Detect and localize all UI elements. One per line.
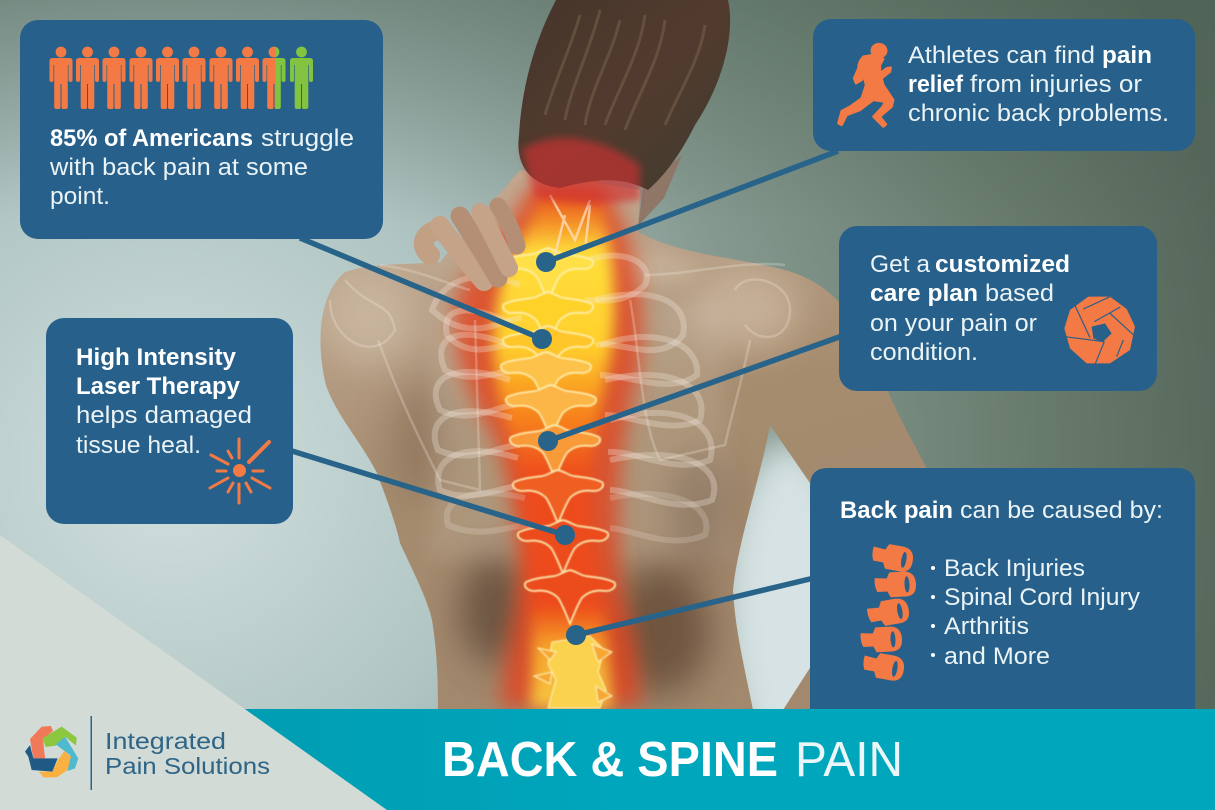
bullet list: Spinal Cord Injury xyxy=(944,584,1140,611)
text xyxy=(76,344,252,459)
title: PAIN xyxy=(795,733,903,787)
hair xyxy=(518,0,730,190)
bullet list: and More xyxy=(944,643,1050,670)
cheek xyxy=(638,155,682,226)
title: BACK & SPINE xyxy=(442,733,778,787)
bullet list xyxy=(931,555,1140,670)
text: struggle xyxy=(261,125,354,152)
panel: customized care plan xyxy=(839,226,1157,391)
shoulder bones xyxy=(330,264,790,490)
panel: athletes xyxy=(813,19,1195,151)
text: Athletes can find xyxy=(908,42,1095,69)
text xyxy=(870,251,1070,366)
neck vertebrae xyxy=(530,160,640,255)
text: care plan xyxy=(870,280,978,307)
torso and arm xyxy=(320,170,960,710)
text: chronic back problems. xyxy=(908,100,1169,127)
logo text: Pain Solutions xyxy=(105,753,270,779)
text: with back pain at some xyxy=(49,154,308,181)
heading: Back pain xyxy=(840,497,953,524)
text: point. xyxy=(50,183,110,210)
hair highlights xyxy=(545,10,705,130)
icon: laser burst xyxy=(210,439,270,503)
text: condition. xyxy=(870,339,978,366)
logo text: Integrated xyxy=(105,728,226,754)
panel: causes xyxy=(810,468,1195,710)
heading xyxy=(840,497,1163,524)
text: customized xyxy=(935,251,1070,278)
heading: can be caused by: xyxy=(960,497,1163,524)
panel: 85% of Americans xyxy=(20,20,383,239)
lower yellow vertebrae xyxy=(534,636,612,708)
panel: laser therapy xyxy=(46,318,293,524)
text: on your pain or xyxy=(870,310,1037,337)
logo text xyxy=(105,728,270,779)
hand xyxy=(424,206,517,281)
logo mark xyxy=(25,726,78,777)
icon: runner xyxy=(838,44,893,127)
text: tissue heal. xyxy=(76,432,201,459)
text xyxy=(908,42,1169,127)
logo divider xyxy=(90,716,92,790)
text xyxy=(49,125,354,210)
neck pain glow xyxy=(522,138,640,205)
bullet list: Back Injuries xyxy=(944,555,1085,582)
man's back photo illustration xyxy=(320,0,960,710)
logo corner panel xyxy=(0,535,387,810)
text: pain xyxy=(1102,42,1152,69)
bullet list: Arthritis xyxy=(944,613,1029,640)
text: Get a xyxy=(870,251,931,278)
icon: knot xyxy=(1064,297,1135,364)
text: High Intensity xyxy=(76,344,237,371)
ribs xyxy=(432,256,714,541)
icon row: people xyxy=(50,47,313,109)
vertebrae xyxy=(501,248,615,624)
spine glow xyxy=(454,185,643,708)
text: Laser Therapy xyxy=(76,373,241,400)
text: from injuries or xyxy=(970,71,1142,98)
bottom title banner xyxy=(240,709,1215,810)
text: based xyxy=(985,280,1054,307)
text: helps damaged xyxy=(76,402,252,429)
callout lines and dots xyxy=(292,151,842,645)
body shading xyxy=(325,248,800,695)
icon: vertebrae xyxy=(860,542,917,682)
text: relief xyxy=(908,71,964,98)
text: 85% of Americans xyxy=(50,125,253,152)
